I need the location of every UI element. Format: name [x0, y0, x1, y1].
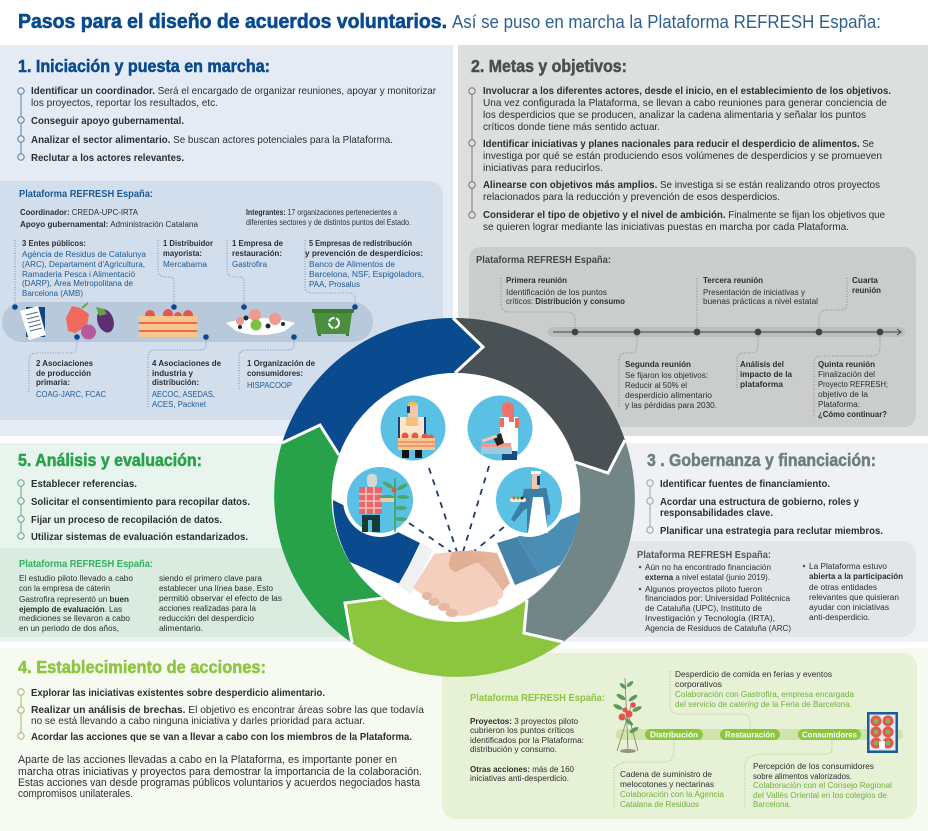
timeline labels bottom [625, 360, 888, 419]
actors top: Ramaderia Pesca i Alimentació [22, 270, 136, 279]
panel: 1 iniciación [0, 45, 453, 436]
box text columns: en un periodo de dos años, [19, 624, 119, 633]
icon: vegetables [66, 303, 117, 340]
paragraph: marcha otras iniciativas y proyectos para demostrar la importancia de la colaboración. [18, 766, 422, 778]
projects text: Otras acciones: más de 160 [470, 765, 575, 774]
chain text right: Percepción de los consumidores [753, 762, 874, 771]
steps timeline 4 [18, 689, 24, 739]
steps text 5: Fijar un proceso de recopilación de datos. [31, 514, 222, 526]
chain band [616, 729, 903, 740]
chain text top: Desperdicio de comida en ferias y eventos [675, 670, 832, 679]
bullet text: de Cataluña (UPC), Instituto de [645, 604, 763, 613]
timeline labels top: Identificación de los puntos [506, 288, 607, 297]
timeline labels top: críticos: Distribución y consumo [506, 297, 625, 306]
chain text top: Colaboración con Gastrofira, empresa encargada [675, 690, 855, 699]
paragraph [18, 754, 422, 800]
box heading: Plataforma REFRESH España: [476, 254, 611, 266]
projects text [470, 717, 584, 783]
timeline labels top: buenas prácticas a nivel estatal [703, 297, 818, 306]
heading 2: 2. Metas y objetivos: [471, 56, 627, 76]
chain text right: Barcelona. [753, 800, 791, 809]
paragraph: Aparte de las acciones llevadas a cabo en la Plataforma, es importante poner en [18, 754, 397, 766]
actors top: mayorista: [163, 249, 202, 258]
steps text 3 [660, 478, 883, 537]
steps text 2: se quieren lograr mediante las iniciativas puestas en marcha por cada Plataforma. [483, 221, 849, 233]
timeline labels bottom: Finalización del [818, 370, 875, 379]
actors top: (DARP), Àrea Metropolitana de [22, 279, 134, 288]
timeline labels bottom: impacto de la [740, 370, 793, 379]
bullet text: financiados por: Universidad Politécnica [645, 594, 791, 603]
chain text left: melocotones y nectarinas [620, 780, 714, 789]
chain text right: del Vallés Oriental en los colegios de [753, 791, 888, 800]
steps text 5: Solicitar el consentimiento para recopilar datos. [31, 496, 250, 508]
timeline band [548, 327, 905, 337]
actors bottom: COAG-JARC, FCAC [36, 390, 106, 399]
box text columns: siendo el primero clave para [159, 574, 263, 583]
projects text: cubrieron los puntos críticos [470, 726, 574, 735]
wheel segment 2 dark gray [453, 318, 625, 473]
left sleeve [333, 500, 420, 584]
bullet text: relevantes que quisieran [809, 593, 899, 602]
steps text 1: Analizar el sector alimentario. Se buscan actores potenciales para la Plataforma. [31, 134, 393, 146]
box text columns: El estudio piloto llevado a cabo [19, 574, 134, 583]
actors bottom: consumidores: [247, 369, 303, 378]
box text columns: alimentario. [159, 624, 203, 633]
timeline labels top: Cuarta [852, 276, 879, 285]
box text columns: acciones realizadas para la [159, 604, 257, 613]
timeline labels bottom: Proyecto REFRESH; [818, 380, 888, 389]
icon: recycling bin [312, 309, 354, 336]
icon: farmer with plant [343, 463, 417, 537]
bullet text: Agencia de Residuos de Cataluña (ARC) [645, 624, 791, 633]
wheel segment 4 light green [345, 598, 563, 677]
timeline labels top [506, 276, 881, 306]
title: Así se puso en marcha la Plataforma REFRESH España: [452, 12, 881, 32]
actors bottom: 2 Asociaciones [36, 359, 94, 368]
panel: 3 gobernanza [458, 443, 928, 642]
steps text 4: no se está llevando a cabo ninguna iniciativa y darles prioridad para actuar. [31, 715, 365, 727]
bullet text: La Plataforma estuvo [809, 562, 888, 571]
paragraph: Estas acciones van desde programas públicos voluntarios y acuerdos negociados hasta [18, 777, 421, 789]
steps text 1 [31, 85, 436, 164]
projects text: identificados por la Plataforma: [470, 736, 584, 745]
chain text left: Colaboración con la Agencia [620, 790, 725, 799]
coordination text: diferentes sectores y de distintos puntos del Estado. [246, 218, 411, 227]
icon: crate [139, 309, 197, 337]
actors bottom: HISPACOOP [247, 381, 292, 390]
box: Plataforma 4 [442, 653, 917, 819]
actors top: Barcelona (AMB) [22, 289, 83, 298]
chain text top: corporativos [675, 680, 722, 689]
steps text 2: relacionados para la reducción y prevención de esos desperdicios. [483, 191, 780, 203]
coordination text: Coordinador: CREDA-UPC-IRTA [20, 208, 139, 217]
steps timeline 2 [469, 88, 475, 218]
bullet text: Aún no ha encontrado financiación [645, 563, 771, 572]
icon: fruit tray [867, 712, 898, 753]
handshake [413, 550, 510, 617]
timeline labels bottom: Plataforma: [818, 400, 860, 409]
box heading: Plataforma REFRESH España: [470, 692, 605, 704]
timeline labels bottom: Segunda reunión [625, 360, 691, 369]
paragraph: compromisos unilaterales. [18, 788, 133, 800]
actors top: Agència de Residus de Catalunya [22, 250, 147, 259]
steps text 5 [31, 478, 250, 543]
timeline labels bottom: Se fijaron los objetivos: [625, 371, 708, 380]
connector dots [12, 304, 358, 340]
icon: document [20, 306, 46, 340]
box text columns: reducción del desperdicio [159, 614, 255, 623]
cycle wheel [274, 318, 635, 677]
steps text 5: Utilizar sistemas de evaluación estandarizados. [31, 531, 248, 543]
wheel segment 3 medium gray [524, 440, 635, 642]
steps text 5: Establecer referencias. [31, 478, 137, 490]
bullet text [645, 562, 903, 633]
box text columns: mediciones se llevaron a cabo [19, 614, 131, 623]
panel: 4 acciones [0, 648, 928, 831]
box text columns: establecer una línea base. Esto [159, 584, 274, 593]
box text columns: permitió observar el efecto de las [159, 594, 282, 603]
timeline labels top: Tercera reunión [703, 276, 763, 285]
steps text 1: Conseguir apoyo gubernamental. [31, 115, 184, 127]
box: Plataforma 5 [0, 548, 370, 637]
steps text 3: Identificar fuentes de financiamiento. [660, 478, 830, 490]
steps text 4: Explorar las iniciativas existentes sobre desperdicio alimentario. [31, 687, 325, 699]
actors top: y prevención de desperdicios: [305, 249, 423, 258]
bullet text: abierta a la participación [809, 572, 903, 581]
chain text left: Cadena de suministro de [620, 770, 713, 779]
dashed lines [409, 466, 504, 552]
bullet text: Algunos proyectos piloto fueron [645, 585, 762, 594]
timeline labels top: Presentación de iniciativas y [703, 288, 805, 297]
right sleeve [517, 512, 580, 575]
title: Pasos para el diseño de acuerdos voluntarios. [18, 10, 447, 33]
panel: 2 metas [458, 45, 928, 436]
box: Plataforma 2 [469, 247, 916, 427]
steps text 1: Reclutar a los actores relevantes. [31, 152, 184, 164]
actors top: Mercabarna [163, 260, 208, 269]
right cuff [497, 537, 540, 585]
steps text 2 [483, 85, 891, 233]
steps text 1: los proyectos, reportar los resultados, etc. [31, 97, 218, 109]
steps timeline 1 [18, 88, 24, 160]
steps text 2: Alinearse con objetivos más amplios. Se investiga si se están realizando otros proyectos [483, 179, 880, 191]
actors top: restauración: [232, 249, 282, 258]
box text columns: ejemplo de evaluación. Las [19, 605, 122, 614]
actors top: Gastrofira [232, 260, 268, 269]
coordination text: Integrantes: 17 organizaciones pertenecientes a [246, 208, 397, 217]
steps text 2: Una vez configurada la Plataforma, se llevan a cabo reuniones para generar conciencia de [483, 97, 887, 109]
actors bottom: de producción [36, 369, 91, 378]
heading 3: 3 . Gobernanza y financiación: [647, 450, 876, 470]
icon: plate [226, 309, 295, 335]
actors top: Barcelona, NSF, Espigoladors, [309, 270, 424, 279]
box: Plataforma 1 [0, 181, 443, 420]
projects text: distribución y consumo. [470, 745, 557, 754]
steps text 3: Planificar una estrategia para reclutar miembros. [660, 525, 883, 537]
steps timeline 3 [647, 480, 653, 533]
steps text 2: los desperdicios que se producen, analizar la cadena alimentaria y señalar los puntos [483, 109, 866, 121]
bullet text: de otras entidades [809, 583, 877, 592]
box text columns [19, 574, 282, 633]
bullet text: Investigación y Tecnología (IRTA), [645, 614, 775, 623]
timeline labels bottom: desperdicio alimentario [625, 391, 713, 400]
chain pills: Consumidores [802, 730, 858, 740]
bullet text: externa a nivel estatal (junio 2019). [645, 573, 770, 582]
steps text 1: Identificar un coordinador. Será el encargado de organizar reuniones, apoyar y monitorizar [31, 85, 436, 97]
wheel segment 1 blue [282, 318, 483, 455]
timeline labels bottom: plataforma [740, 380, 784, 389]
box: Plataforma 3 [560, 541, 916, 637]
chain text left: Catalana de Residuos [620, 800, 699, 809]
steps text 2: críticos donde tiene más sentido actuar. [483, 121, 660, 133]
timeline labels top: reunión [852, 286, 881, 295]
actors bottom [36, 359, 316, 409]
box heading: Plataforma REFRESH España: [637, 549, 771, 561]
box text columns: Gastrofira representó un buen [19, 595, 129, 604]
wheel segment 5 green [274, 425, 383, 643]
actors top: 1 Distribuidor [163, 239, 213, 248]
chain text right [753, 762, 892, 809]
segment joints [282, 318, 625, 643]
steps text 4 [31, 687, 424, 743]
actors top: 1 Empresa de [232, 239, 284, 248]
projects text: Proyectos: 3 proyectos piloto [470, 717, 579, 726]
actors top: (ARC), Departament d'Agricultura, [22, 260, 145, 269]
timeline labels bottom: Análisis del [740, 360, 784, 369]
dotted connectors [15, 240, 355, 408]
chain text right: Colaboración con el Consejo Regional [753, 781, 892, 790]
steps text 3: responsabilidades clave. [660, 507, 773, 519]
actors bottom: industria y [152, 369, 194, 378]
chain text right: sobre alimentos valorizados. [753, 772, 852, 781]
heading 1: 1. Iniciación y puesta en marcha: [18, 56, 270, 76]
actors bottom: distribución: [152, 378, 199, 387]
icon: waiter [492, 463, 566, 537]
steps text 2: Identificar iniciativas y planes nacionales para reducir el desperdicio de alimentos. Se [483, 138, 874, 150]
steps text 2: iniciativas para reducirlos. [483, 162, 603, 174]
chain pills: Distribución [650, 730, 698, 740]
center disc [332, 373, 580, 621]
chain text left [620, 770, 725, 809]
title [18, 10, 881, 33]
actors top: PAA, Prosalus [309, 280, 360, 289]
timeline labels bottom: ¿Cómo continuar? [818, 410, 887, 419]
timeline labels bottom: Reducir al 50% el [625, 381, 687, 390]
coordination text: Apoyo gubernamental: Administración Catalana [20, 220, 199, 229]
left cuff [398, 543, 433, 594]
icon band [2, 302, 373, 342]
steps text 2: Considerar el tipo de objetivo y el nivel de ambición. Finalmente se fijan los objetivos que [483, 209, 885, 221]
timeline axis [553, 329, 901, 335]
steps text 3: Acordar una estructura de gobierno, roles y [660, 496, 859, 508]
bullet text: ayudar con iniciativas [809, 603, 889, 612]
steps timeline 5 [18, 480, 24, 539]
actors bottom: 4 Asociaciones de [152, 359, 222, 368]
timeline labels bottom: objetivo de la [818, 390, 869, 399]
heading 5: 5. Análisis y evaluación: [18, 450, 202, 470]
heading 4: 4. Establecimiento de acciones: [18, 657, 266, 677]
chain pills: Restauración [725, 730, 775, 740]
projects text: iniciativas anti-desperdicio. [470, 774, 569, 783]
box text columns: con la empresa de cáterin [19, 584, 110, 593]
actors bottom: primaria: [36, 378, 70, 387]
timeline labels bottom: Quinta reunión [818, 360, 875, 369]
chain text top: del servicio de catering de la Feria de Barcelona. [675, 700, 852, 709]
steps text 4: Acordar las acciones que se van a llevar a cabo con los miembros de la Plataforma. [31, 731, 412, 743]
chain pills [645, 729, 861, 740]
timeline connectors [501, 278, 880, 418]
bullet text: anti-desperdicio. [809, 613, 870, 622]
actors top: 5 Empresas de redistribución [309, 239, 412, 248]
steps text 2: investiga por qué se están produciendo esos volúmenes de desperdicios y se promueven [483, 150, 882, 162]
steps text 4: Realizar un análisis de brechas. El objetivo es encontrar áreas sobre las que todavía [31, 704, 424, 716]
bullet dots [639, 565, 805, 590]
steps text 2: Involucrar a los diferentes actores, desde el inicio, en el establecimiento de los objetivos. [483, 85, 891, 97]
actors top: Banco de Alimentos de [309, 260, 396, 269]
chain connectors [614, 671, 832, 808]
icon: food worker [468, 396, 532, 460]
timeline labels top: Primera reunión [506, 276, 567, 285]
timeline labels bottom: y las pérdidas para 2030. [625, 401, 717, 410]
actors top [22, 239, 424, 298]
icon: tomato plant [613, 678, 642, 753]
coordination text [20, 208, 411, 229]
actors bottom: 1 Organización de [247, 359, 316, 368]
actors bottom: AECOC, ASEDAS, [152, 390, 215, 399]
actors bottom: ACES, Packnet [152, 400, 207, 409]
chain text top [675, 670, 855, 709]
panel: 5 análisis [0, 443, 453, 642]
icon: worker with crate [380, 396, 446, 460]
box heading: Plataforma REFRESH España: [19, 558, 153, 570]
box heading: Plataforma REFRESH España: [19, 188, 153, 200]
actors top: 3 Entes públicos: [22, 239, 86, 248]
